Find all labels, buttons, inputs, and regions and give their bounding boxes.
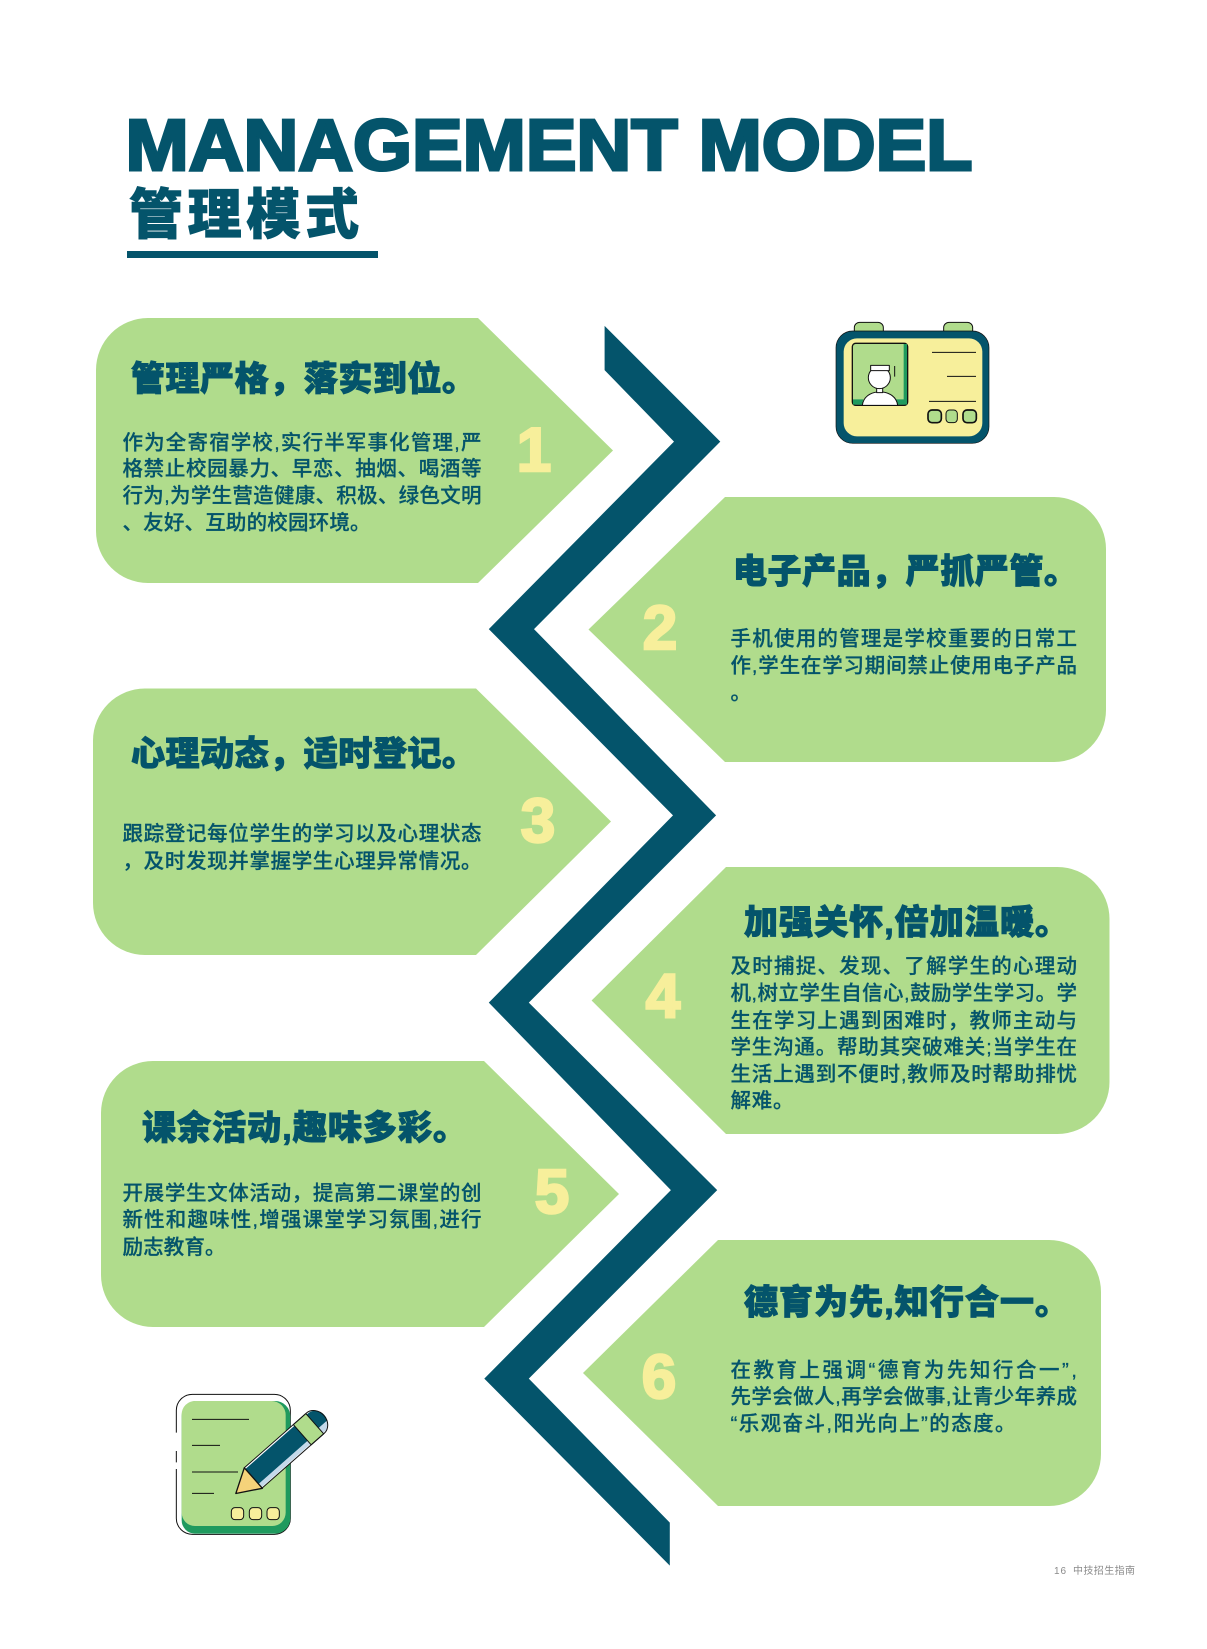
step 1 body: 行为,为学生营造健康、积极、绿色文明 xyxy=(122,484,482,508)
step 3 body: ，及时发现并掌握学生心理异常情况。 xyxy=(122,850,482,873)
step 4 body: 生在学习上遇到困难时，教师主动与 xyxy=(730,1010,1077,1032)
step 2 heading: 电子产品，严抓严管。 xyxy=(733,553,1078,591)
number 4: 4 xyxy=(646,962,681,1031)
step 4 body: 解难。 xyxy=(730,1090,794,1112)
step 3 body xyxy=(122,822,482,873)
page footer: 16 xyxy=(1054,1566,1067,1577)
number 5: 5 xyxy=(535,1158,569,1227)
step 4 body: 及时捕捉、发现、了解学生的心理动 xyxy=(730,955,1077,978)
step 6 heading: 德育为先,知行合一。 xyxy=(744,1283,1069,1322)
step 1 body: 作为全寄宿学校,实行半军事化管理,严 xyxy=(122,432,482,454)
step 2 body: 。 xyxy=(730,682,751,704)
panel: step 2 xyxy=(588,497,1106,762)
chinese heading: 管理模式 xyxy=(129,186,359,246)
number 3: 3 xyxy=(521,787,555,856)
number 1: 1 xyxy=(517,416,551,485)
step 5 body: 新性和趣味性,增强课堂学习氛围,进行 xyxy=(122,1208,482,1232)
page footer xyxy=(1054,1564,1135,1577)
icon: id card xyxy=(836,322,989,443)
step 4 body: 机,树立学生自信心,鼓励学生学习。学 xyxy=(730,982,1077,1005)
step 5 body xyxy=(122,1182,482,1259)
step 3 heading: 心理动态，适时登记。 xyxy=(131,735,476,774)
step 1 heading: 管理严格，落实到位。 xyxy=(131,360,476,398)
page footer: 中技招生指南 xyxy=(1073,1564,1135,1577)
panel: step 1 xyxy=(96,318,613,583)
step 2 body: 作,学生在学习期间禁止使用电子产品 xyxy=(730,654,1077,678)
step 2 body: 手机使用的管理是学校重要的日常工 xyxy=(730,628,1077,650)
step 5 heading: 课余活动,趣味多彩。 xyxy=(142,1109,467,1147)
panel: step 3 xyxy=(93,688,611,955)
step 5 body: 开展学生文体活动，提高第二课堂的创 xyxy=(122,1182,482,1205)
step 4 heading: 加强关怀,倍加温暖。 xyxy=(744,903,1069,942)
step 6 body: 在教育上强调“德育为先知行合一”, xyxy=(730,1359,1077,1382)
number 6: 6 xyxy=(642,1343,676,1412)
step 4 body: 学生沟通。帮助其突破难关;当学生在 xyxy=(730,1036,1077,1059)
step 1 body xyxy=(122,432,482,534)
panel: step 4 xyxy=(592,867,1110,1134)
zigzag arrow line xyxy=(484,326,720,1566)
step 6 body xyxy=(730,1359,1077,1436)
step 6 body: 先学会做人,再学会做事,让青少年养成 xyxy=(730,1386,1077,1408)
step 4 body: 生活上遇到不便时,教师及时帮助排忧 xyxy=(730,1063,1077,1086)
number 2: 2 xyxy=(643,594,677,663)
panel: step 6 xyxy=(583,1240,1101,1506)
step 4 body xyxy=(730,955,1077,1112)
step 2 body xyxy=(730,628,1077,704)
step 5 body: 励志教育。 xyxy=(122,1236,226,1259)
title xyxy=(126,106,972,258)
icon: notepad and pencil xyxy=(175,1394,334,1534)
step 1 body: 、友好、互助的校园环境。 xyxy=(122,512,370,534)
step 1 body: 格禁止校园暴力、早恋、抽烟、喝酒等 xyxy=(122,456,482,480)
panel: step 5 xyxy=(101,1061,619,1327)
step 3 body: 跟踪登记每位学生的学习以及心理状态 xyxy=(122,822,482,846)
step 6 body: “乐观奋斗,阳光向上”的态度。 xyxy=(730,1412,1016,1436)
title underline xyxy=(127,251,378,258)
english heading: MANAGEMENT MODEL xyxy=(126,106,972,186)
